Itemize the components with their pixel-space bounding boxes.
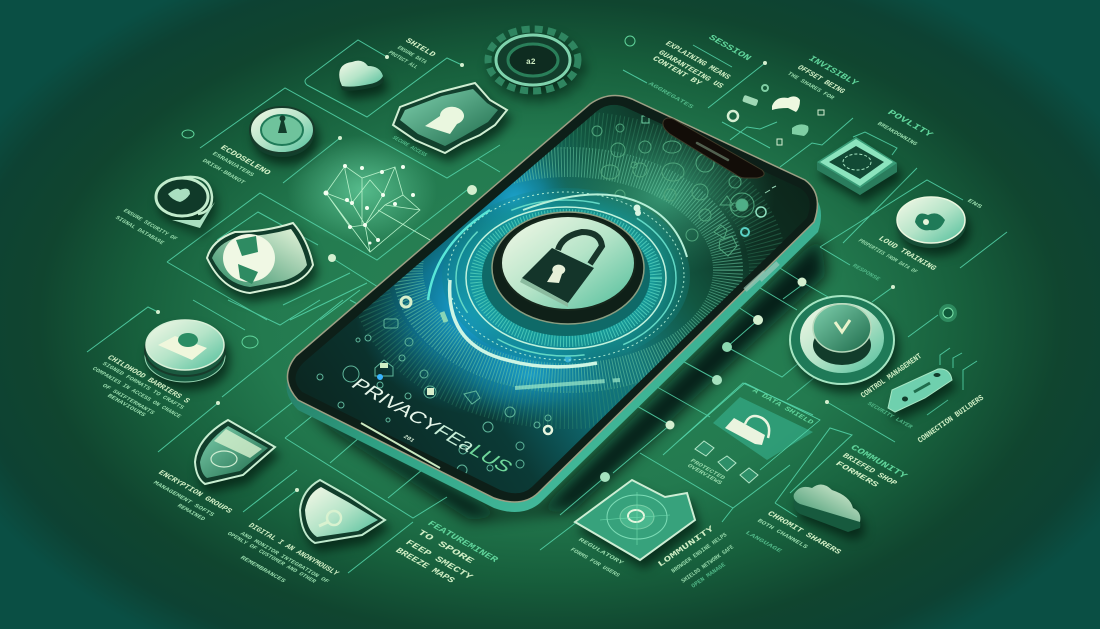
label: radar side: FORMS FOR USERS (568, 547, 622, 578)
label: policy: BREAKDOWNING (875, 121, 919, 147)
label: encryption: ENCRYPTION GROUPS (156, 469, 234, 515)
label: policy: POVLITY (885, 108, 936, 139)
label: encrypted messaging: EXPLAINING MEANS (663, 40, 732, 81)
icon: square chip (817, 137, 897, 195)
label: card icons: PROTECTED (688, 458, 727, 481)
label: encrypted messaging: GUARANTEEING US (656, 49, 725, 90)
label: digital: AND MONITOR INTEGRATION OF (238, 531, 331, 585)
phone bezel (287, 95, 817, 502)
connector lines (87, 40, 1007, 573)
icon: gear (488, 29, 578, 91)
blue indicator dots (377, 374, 383, 380)
label: encrypted data (200, 144, 273, 186)
icon: radar shield (575, 480, 695, 560)
connector nodes (156, 55, 895, 492)
hatch arcs (408, 162, 728, 378)
label: digital: OPENLY OF CUSTOMER AND OTHER (225, 531, 318, 585)
icon: magnifier shield (300, 480, 385, 543)
lock button (482, 212, 650, 336)
phone (286, 95, 821, 512)
icon: polygon network (287, 135, 437, 252)
labels top left (113, 37, 438, 246)
label: bubble: ENSURE SECURITY OF (121, 208, 179, 242)
phone screen (295, 105, 810, 493)
icon: heart bubble (156, 177, 215, 228)
icon: tag (888, 369, 952, 412)
icon: circuit cluster (728, 85, 824, 145)
label: encrypted messaging: AGGREGATES (646, 81, 696, 110)
icon: keyhole coin (250, 107, 314, 157)
label: cloud training: PROPERTIES FROM DATA OF (856, 238, 919, 275)
label: key shield: SECURE ACCESS (390, 135, 429, 158)
label: digital: DIGITAL I AN ANONYMOUSLY (246, 522, 341, 578)
label: community radar (656, 524, 735, 590)
label: privacy left: COMPANIES IN ACCESS ON CHANCE (90, 366, 183, 420)
label: community radar: LOMMUNITY (656, 524, 716, 569)
label: community (833, 443, 910, 489)
icon: cloud (794, 484, 860, 532)
label: data shield: A DATA SHIELD (750, 388, 815, 426)
screen icons lower left (317, 297, 552, 475)
label: radar side (568, 537, 626, 578)
label: community: FORMERS (833, 460, 881, 489)
label: encrypted data: ESRANUATERS (210, 151, 256, 178)
label: card icons (685, 458, 727, 486)
label: community radar: SHIELDS NETWORK SAFE (680, 543, 735, 585)
labels top right (646, 33, 984, 282)
label: features green: BREEZE MAPS (393, 546, 457, 585)
label: cloud training: RESPONSE (850, 263, 882, 282)
label: card icons: OVERVIEWS (685, 463, 724, 486)
label: top shield: SHIELD (403, 37, 438, 59)
label: encrypted data: DRISH-BRANOT (200, 158, 247, 186)
label: chromit: LANGUAGE (743, 530, 784, 554)
label: privacy left: BEHAVIOURS (105, 393, 148, 418)
icon: check knob (790, 296, 894, 384)
label: features green: FEEP SMECTY (403, 538, 475, 582)
labels bottom left (90, 354, 501, 585)
label: community radar: OPEN MANAGE (690, 561, 727, 590)
label: top shield: ENSURE DATA (395, 45, 429, 65)
label: session: SESSION (706, 33, 753, 62)
label: small tag: ENS (965, 198, 984, 210)
label: encryption: MANAGEMENT SOFTS (151, 480, 216, 518)
home bar (361, 423, 440, 468)
label: community: COMMUNITY (848, 443, 910, 481)
phone side edge (286, 103, 821, 512)
label: encryption: REMAINED (175, 503, 207, 522)
label: chromit: BOTH CHANNELS (755, 518, 810, 550)
icon: folder coin (145, 320, 225, 382)
label: invisibly (785, 54, 861, 101)
screen icons upper right (592, 116, 776, 256)
label: invisibly: THE SHARES FOR (785, 71, 836, 101)
screen title: PRIVACYFEaLUS (346, 376, 517, 476)
small glyph icons (182, 36, 635, 348)
small card icons (695, 441, 758, 483)
label: cloud training: LOUD TRAINING (876, 235, 938, 272)
phone shadow (300, 235, 826, 520)
icon: small check badge (939, 304, 957, 322)
label: features green: FEATUREMINER (425, 519, 501, 565)
label: digital: REMEMBRANCES (238, 555, 288, 584)
label: top shield (386, 37, 438, 70)
label: encrypted data: ECDOSELENO (218, 144, 273, 177)
label: control (859, 352, 986, 445)
label: community radar: BROWSER ENGINE HELPS (670, 531, 729, 575)
label: invisibly: INVISIBLY (806, 54, 861, 88)
icon: cloud coin (896, 197, 966, 248)
label: control: SECURITY LAYER (865, 401, 915, 430)
label: privacy left: SIGNED FORMATS TO CRAFTS (100, 361, 186, 411)
label: encrypted messaging (646, 40, 732, 110)
label: control: CONTROL MANAGEMENT (859, 352, 924, 400)
side buttons (745, 263, 778, 290)
label: encrypted messaging: CONTENT BY (650, 55, 704, 88)
notch (663, 118, 764, 178)
padlock icon (520, 232, 602, 307)
labels bottom right (568, 352, 986, 590)
label: community: BRIEFED SHOP (840, 452, 899, 487)
speaker (697, 143, 728, 160)
label: privacy left: OF SHIFTERMANTS (100, 383, 157, 416)
icon: keyhole shield (393, 83, 507, 153)
label: invisibly: OFFSET BEING (795, 64, 847, 96)
label: top shield: PROTECT ALL (386, 50, 420, 70)
label: privacy left: CHILDHOOD BARRIERS S (105, 354, 192, 405)
icon: globe shield (207, 223, 313, 293)
icon: heart (339, 61, 384, 91)
label: features green: TO SPORE (415, 528, 476, 565)
screen small label: 201 (401, 434, 417, 444)
gear center text: a2 (526, 58, 536, 67)
label: policy (875, 108, 936, 147)
label: bubble: SIGNAL DATABASE (113, 215, 166, 246)
icon: lower left shield (195, 420, 275, 484)
label: radar side: REGULATORY (576, 537, 626, 566)
label: features green (393, 519, 501, 585)
label: control: CONNECTION BUILDERS (916, 394, 986, 445)
icon: glass lock card (680, 383, 820, 483)
lock rings (428, 188, 690, 388)
label: chromit (743, 510, 843, 556)
label: chromit: CHROMIT SHARERS (765, 510, 843, 556)
